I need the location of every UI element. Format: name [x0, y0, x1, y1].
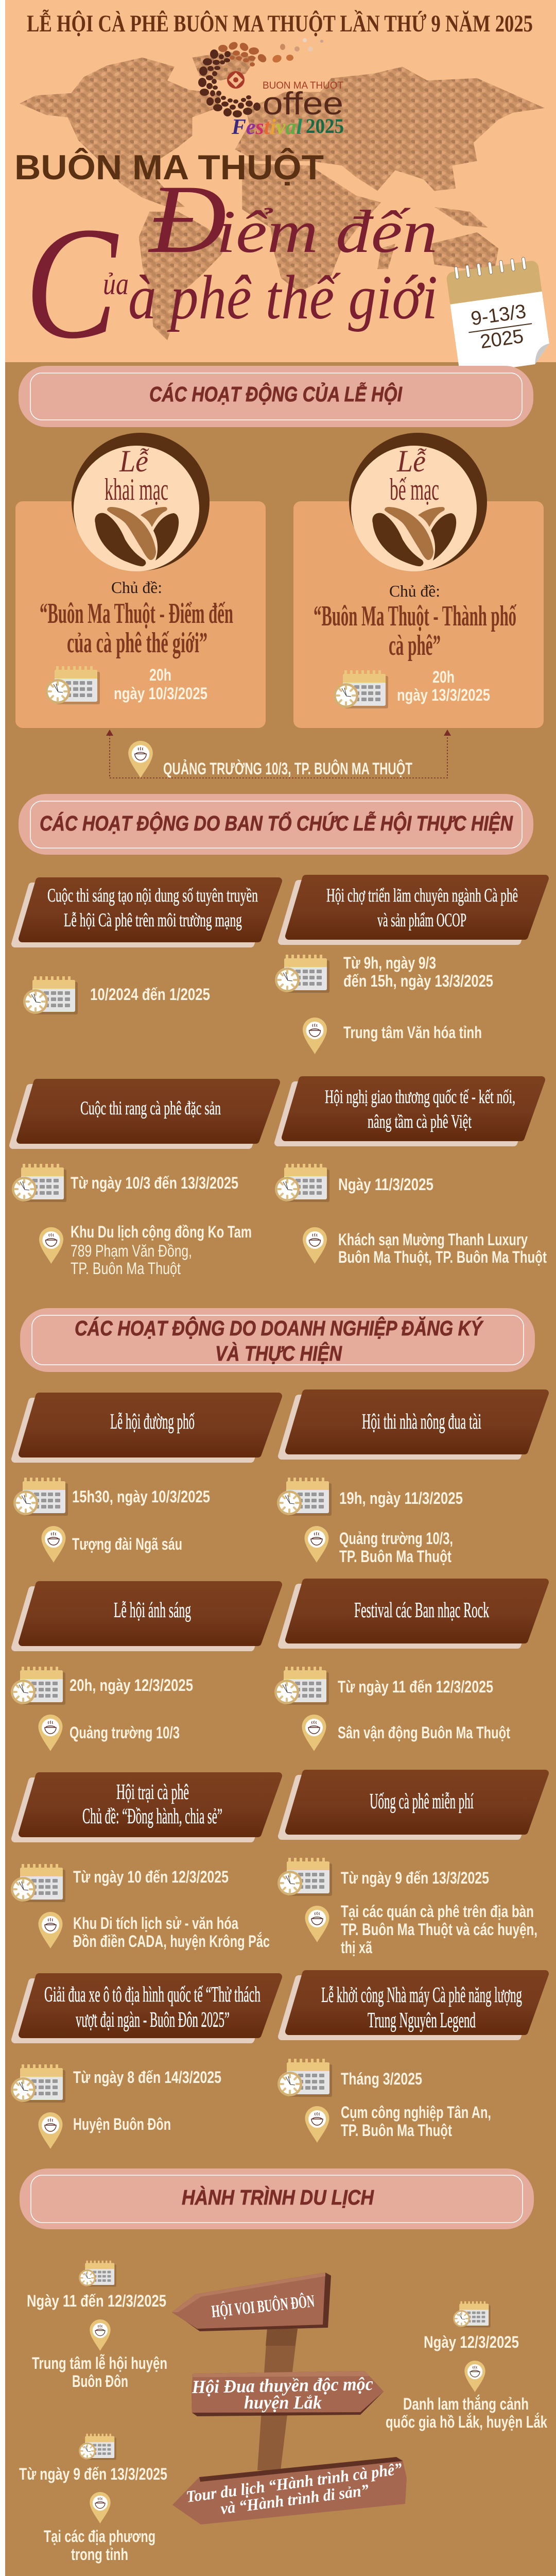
- icon: calendar: [45, 666, 100, 704]
- icon: coffee bean egg badge: [349, 433, 487, 571]
- activity: hội thi nhà nông đua tài: 19h, ngày 11/3/2025: [339, 1489, 463, 1507]
- sign: hội voi buôn đôn: [172, 2273, 331, 2331]
- date calendar note: 9-13/3: [470, 301, 528, 330]
- activity: cuộc thi sáng tạo nội dung số: Lễ hội Cà phê trên môi trường mạng: [64, 910, 242, 931]
- journey: hội voi buôn đôn details: Ngày 11 đến 12/3/2025: [27, 2292, 166, 2310]
- journey: hội voi buôn đôn details: Trung tâm lễ hội huyện: [32, 2354, 167, 2372]
- activity: hội trại cà phê: Khu Di tích lịch sử - văn hóa: [73, 1914, 238, 1933]
- headline script: Điểm đến: iểm đến: [216, 198, 438, 265]
- activity: hội chợ triển lãm: Từ 9h, ngày 9/3: [343, 954, 436, 972]
- date text: ngày 13/3/2025: [397, 686, 490, 704]
- header panel: [5, 0, 556, 375]
- activity: lễ hội ánh sáng: 20h, ngày 12/3/2025: [70, 1676, 193, 1694]
- activity: lễ hội ánh sáng: Lễ hội ánh sáng: [114, 1599, 191, 1622]
- activity: lễ hội đường phố: [13, 1396, 279, 1563]
- section 3 heading: [20, 1308, 535, 1372]
- sign: tour du lịch: [172, 2457, 407, 2524]
- panel: lễ khai mạc: khai mạc: [105, 472, 168, 506]
- journey: đua thuyền details: [386, 2301, 547, 2431]
- activity: giải đua xe ô tô địa hình: vượt đại ngàn - Buôn Đôn 2025”: [76, 2008, 230, 2032]
- activity: hội trại cà phê: Đồn điền CADA, huyện Krông Pắc: [73, 1932, 270, 1951]
- sign: hội voi buôn đôn: HỘI VOI BUÔN ĐÔN: [211, 2291, 316, 2321]
- activity: hội chợ triển lãm: [275, 878, 545, 1054]
- activity: cuộc thi rang cà phê: 789 Phạm Văn Đồng,: [71, 1242, 192, 1260]
- festival logo: BUON MA THUOT: [263, 80, 343, 91]
- activity: hội thi nhà nông đua tài: TP. Buôn Ma Thuột: [339, 1547, 451, 1566]
- activity: lễ hội đường phố: Lễ hội đường phố: [110, 1410, 195, 1434]
- activity: lễ hội ánh sáng: Quảng trường 10/3: [70, 1723, 180, 1742]
- activity: cuộc thi sáng tạo nội dung số: Cuộc thi sáng tạo nội dung số tuyên truyền: [47, 885, 258, 906]
- journey: tour du lịch details: Tại các địa phương: [44, 2527, 155, 2546]
- date calendar note: 2025: [479, 326, 525, 353]
- section 4 heading: HÀNH TRÌNH DU LỊCH: [182, 2185, 374, 2209]
- activity: cuộc thi rang cà phê: TP. Buôn Ma Thuột: [71, 1259, 181, 1278]
- festival logo: Festival: [231, 115, 302, 139]
- sign: hội đua thuyền độc mộc: Hội Đua thuyền độc mộc: [191, 2374, 373, 2397]
- activity: lễ hội đường phố: Tượng đài Ngã sáu: [72, 1535, 182, 1553]
- sign: hội đua thuyền độc mộc: [191, 2371, 384, 2416]
- headline script: Điểm đến: Đ: [148, 165, 227, 274]
- activity: hội nghị giao thương: nâng tầm cà phê Việt: [368, 1111, 472, 1132]
- icon: venue pin: [128, 741, 153, 778]
- date text: ngày 10/3/2025: [114, 684, 207, 703]
- date calendar note: [445, 255, 552, 375]
- theme text: [40, 578, 233, 659]
- panel: lễ bế mạc: bế mạc: [390, 472, 439, 506]
- activity: lễ khởi công nhà máy: Tháng 3/2025: [341, 2070, 422, 2088]
- activity: cuộc thi sáng tạo nội dung số: 10/2024 đến 1/2025: [90, 985, 210, 1004]
- date text: 20h: [432, 668, 455, 686]
- headline script: của cà phê thế giới: à phê thế giới: [128, 263, 438, 332]
- headline: Buôn Ma Thuột: BUÔN MA THUỘT: [14, 147, 324, 187]
- panel: lễ bế mạc: [293, 433, 544, 728]
- activity: hội chợ triển lãm: đến 15h, ngày 13/3/2025: [343, 972, 493, 990]
- activity: cuộc thi rang cà phê: Từ ngày 10/3 đến 13/3/2025: [71, 1174, 238, 1192]
- festival logo: offee: [263, 86, 343, 122]
- sign: hội đua thuyền độc mộc: huyện Lắk: [244, 2392, 322, 2413]
- activity: cuộc thi rang cà phê: [12, 1082, 276, 1278]
- date text: [114, 666, 207, 703]
- journey: hội voi buôn đôn details: Buôn Đôn: [72, 2372, 128, 2391]
- activity: lễ hội đường phố: 15h30, ngày 10/3/2025: [72, 1487, 210, 1506]
- journey: tour du lịch details: [19, 2434, 167, 2564]
- activity: hội chợ triển lãm: và sản phẩm OCOP: [377, 910, 466, 931]
- journey: đua thuyền details: Ngày 12/3/2025: [424, 2333, 519, 2351]
- activity: cuộc thi sáng tạo nội dung số: [15, 881, 279, 1014]
- venue connector arrows: [106, 730, 451, 778]
- journey: tour du lịch details: trong tỉnh: [71, 2545, 128, 2564]
- sign: tour du lịch: Tour du lịch “Hành trình cà phê”: [185, 2459, 403, 2506]
- activity: lễ khởi công nhà máy: [277, 1974, 545, 2143]
- activity: hội trại cà phê: [11, 1776, 279, 1951]
- activity: uống cà phê miễn phí: thị xã: [341, 1938, 372, 1957]
- headline script: của cà phê thế giới: C: [25, 194, 120, 372]
- world map made of coffee beans: [20, 52, 545, 341]
- icon: coffee bean egg badge: [72, 433, 210, 571]
- activity: giải đua xe ô tô địa hình: [11, 1977, 279, 2149]
- date text: [397, 668, 490, 704]
- journey: hội voi buôn đôn details: [27, 2261, 167, 2391]
- activity: lễ khởi công nhà máy: TP. Buôn Ma Thuột: [341, 2121, 452, 2140]
- signpost pole: [257, 2329, 298, 2470]
- festival logo: [198, 38, 344, 139]
- theme text: Chủ đề:: [111, 578, 162, 597]
- activity: hội thi nhà nông đua tài: Quảng trường 10/3,: [339, 1529, 453, 1548]
- panel: lễ khai mạc: [15, 433, 266, 728]
- sign: tour du lịch: và “Hành trình di sản”: [219, 2480, 370, 2518]
- logo emblem: [227, 71, 245, 89]
- panel: lễ khai mạc: Lễ: [119, 444, 149, 478]
- activity: cuộc thi rang cà phê: Cuộc thi rang cà phê đặc sản: [80, 1098, 221, 1119]
- activity: hội thi nhà nông đua tài: [277, 1393, 545, 1566]
- activity: giải đua xe ô tô địa hình: Huyện Buôn Đôn: [73, 2115, 171, 2133]
- activity: festival ban nhạc rock: Từ ngày 11 đến 12/3/2025: [338, 1677, 493, 1696]
- theme text: [314, 582, 517, 662]
- section 3 heading: VÀ THỰC HIỆN: [215, 1342, 342, 1365]
- date text: 20h: [149, 666, 171, 684]
- section 4 heading: [20, 2168, 534, 2229]
- section 1 heading: [19, 366, 533, 427]
- activity: hội trại cà phê: Hội trại cà phê: [116, 1781, 189, 1804]
- venue text: QUẢNG TRƯỜNG 10/3, TP. BUÔN MA THUỘT: [163, 759, 412, 778]
- activity: cuộc thi rang cà phê: Khu Du lịch cộng đồng Ko Tam: [71, 1223, 252, 1241]
- activity: hội nghị giao thương: [275, 1080, 547, 1266]
- activity: hội trại cà phê: Chủ đề: “Đồng hành, chia sẻ”: [82, 1805, 222, 1828]
- panel: lễ bế mạc: Lễ: [396, 444, 427, 478]
- section 1 heading: CÁC HOẠT ĐỘNG CỦA LỄ HỘI: [149, 382, 403, 406]
- activity: hội trại cà phê: Từ ngày 10 đến 12/3/2025: [73, 1868, 229, 1886]
- signpost: [172, 2273, 407, 2524]
- activity: lễ hội ánh sáng: [11, 1585, 279, 1751]
- theme text: cà phê”: [389, 630, 441, 662]
- activity: uống cà phê miễn phí: [277, 1773, 545, 1957]
- activity: festival ban nhạc rock: [274, 1582, 545, 1751]
- activity: giải đua xe ô tô địa hình: Giải đua xe ô tô địa hình quốc tế “Thử thách: [44, 1983, 260, 2007]
- theme text: Chủ đề:: [389, 582, 440, 600]
- icon: calendar: [334, 670, 388, 708]
- headline script: của cà phê thế giới: [25, 194, 438, 372]
- activity: uống cà phê miễn phí: Uống cà phê miễn phí: [370, 1790, 474, 1814]
- activity: giải đua xe ô tô địa hình: Từ ngày 8 đến 14/3/2025: [73, 2068, 221, 2087]
- journey: tour du lịch details: Từ ngày 9 đến 13/3/2025: [19, 2465, 167, 2483]
- headline script: của cà phê thế giới: ủa: [103, 267, 129, 301]
- theme text: của cà phê thế giới”: [67, 627, 207, 659]
- section 2 heading: [19, 794, 533, 855]
- activity: hội chợ triển lãm: Trung tâm Văn hóa tỉnh: [343, 1023, 482, 1042]
- section 3 heading: CÁC HOẠT ĐỘNG DO DOANH NGHIỆP ĐĂNG KÝ: [75, 1316, 484, 1340]
- activity: lễ khởi công nhà máy: Cụm công nghiệp Tân An,: [341, 2103, 491, 2122]
- theme text: “Buôn Ma Thuột - Điểm đến: [40, 598, 233, 630]
- activity: uống cà phê miễn phí: Từ ngày 9 đến 13/3/2025: [341, 1869, 489, 1887]
- headline script: Điểm đến: [148, 165, 438, 274]
- festival logo: 2025: [306, 114, 344, 138]
- activity: hội nghị giao thương: Ngày 11/3/2025: [338, 1175, 433, 1194]
